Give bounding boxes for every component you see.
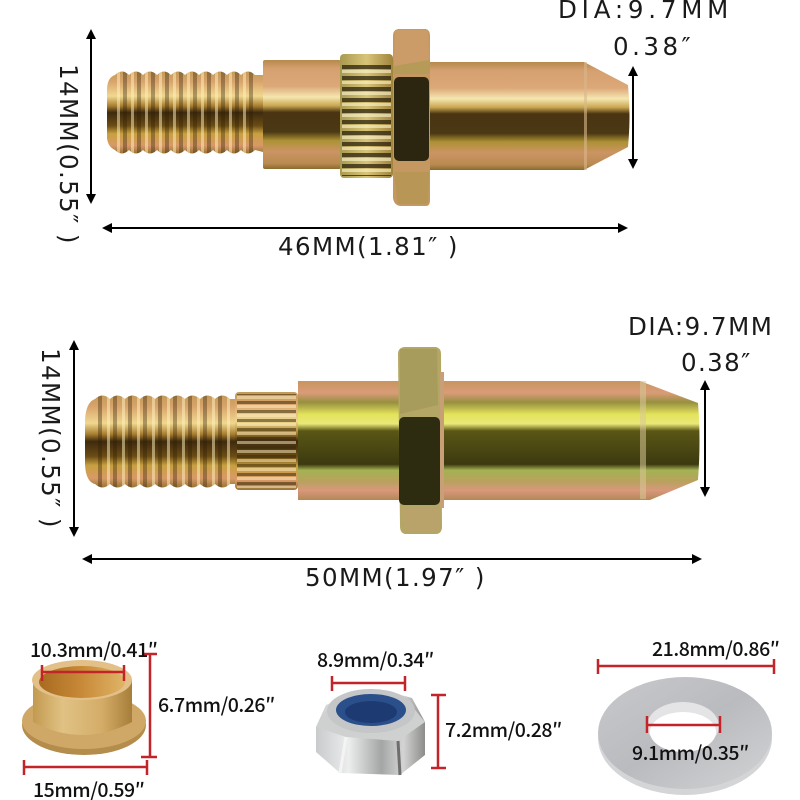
bottom length arrow (82, 554, 702, 564)
washer hole line (647, 716, 720, 733)
bottom height label: 14MM(0.55″ ) (36, 348, 65, 529)
top height label: 14MM(0.55″ ) (54, 64, 83, 245)
brass bushing (22, 660, 146, 755)
nut height label: 7.2mm/0.28″ (445, 714, 562, 743)
top bolt main body (428, 62, 630, 170)
top bolt knurl (340, 54, 393, 178)
top bolt taper band (584, 62, 587, 170)
top bolt (107, 29, 630, 206)
bottom diameter label: DIA:9.7MM (628, 312, 773, 341)
top tip diameter arrow (628, 66, 638, 169)
nut height line (431, 695, 446, 768)
bottom vertical dimension arrow (69, 340, 79, 537)
top diameter inches label: 0.38″ (613, 32, 694, 61)
bottom bolt taper band (640, 381, 646, 499)
bushing height line (141, 654, 157, 757)
bottom bolt knurl (235, 392, 298, 490)
bushing width line (24, 760, 147, 775)
washer outer label: 21.8mm/0.86″ (652, 633, 779, 662)
steel washer (598, 677, 772, 795)
bottom bolt (85, 347, 700, 534)
top length label: 46MM(1.81″ ) (278, 232, 459, 261)
bushing inner diameter label: 10.3mm/0.41″ (30, 634, 157, 663)
bushing height label: 6.7mm/0.26″ (158, 689, 275, 718)
top bolt shank (263, 60, 341, 169)
nut width label: 8.9mm/0.34″ (317, 644, 434, 673)
top length arrow (102, 223, 628, 233)
washer hole label: 9.1mm/0.35″ (632, 737, 749, 766)
nut width line (332, 676, 405, 691)
top vertical dimension arrow (86, 29, 96, 204)
washer outer line (598, 659, 774, 674)
bottom tip diameter arrow (700, 380, 710, 497)
top bolt hex collar (393, 29, 430, 206)
top bolt thread (107, 72, 263, 154)
bottom bolt thread (85, 396, 237, 488)
bottom bolt main body (298, 381, 700, 500)
bottom diameter inches label: 0.38″ (681, 348, 752, 377)
bottom length label: 50MM(1.97″ ) (305, 563, 486, 592)
bottom bolt hex collar (398, 347, 444, 534)
bushing inner diameter line (42, 665, 124, 681)
nylon lock nut (316, 689, 425, 775)
